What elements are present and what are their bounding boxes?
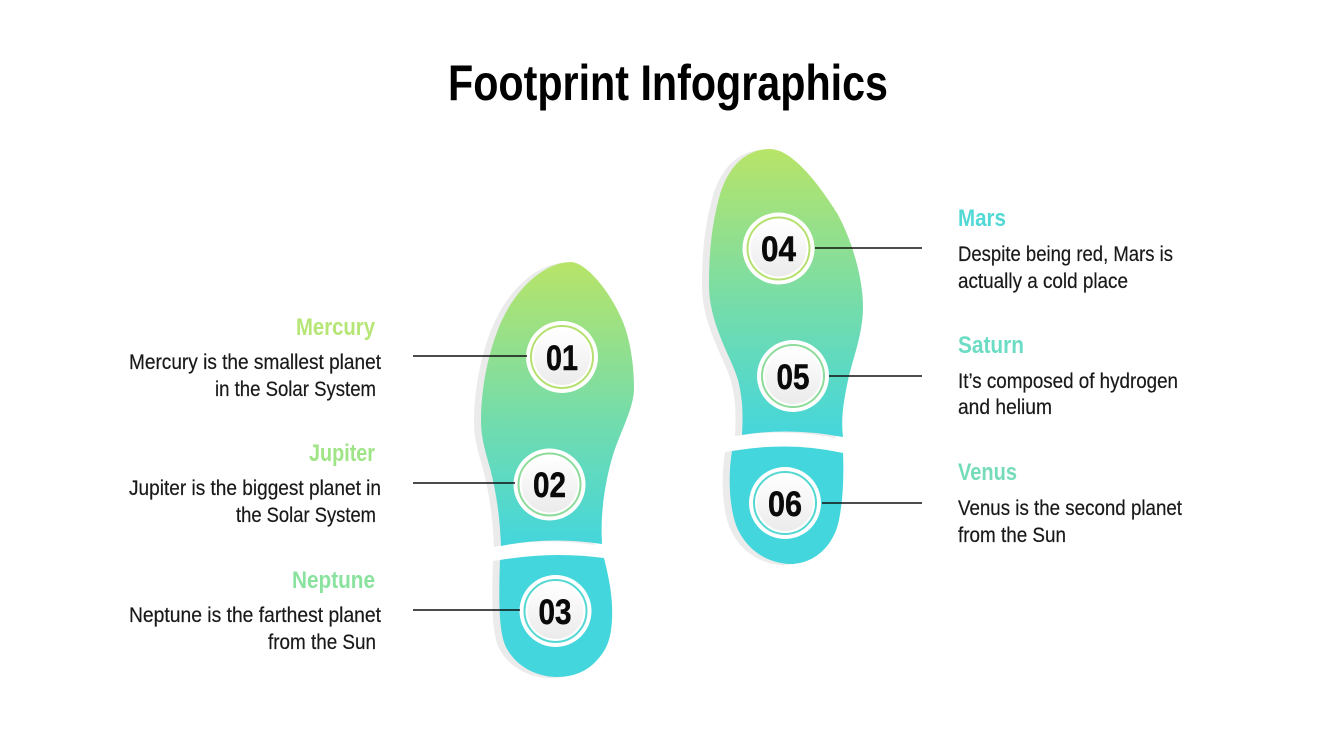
marker 03: 03 <box>538 593 572 632</box>
text block: Jupiter: Jupiter <box>309 440 375 467</box>
text block: Venus: from the Sun <box>958 524 1066 547</box>
text block: Saturn: Saturn <box>958 332 1024 359</box>
marker 05: 05 <box>776 358 810 397</box>
text block: Neptune: from the Sun <box>268 631 376 654</box>
text block: Mercury: Mercury <box>296 314 376 341</box>
marker 02 <box>514 448 586 520</box>
marker 06: 06 <box>768 485 802 524</box>
text block: Jupiter <box>129 440 381 527</box>
text block: Venus: Venus is the second planet <box>958 497 1182 520</box>
left sole <box>481 262 634 546</box>
text block: Mercury: Mercury is the smallest planet <box>129 351 381 374</box>
left heel shadow <box>492 556 605 678</box>
marker 04: 04 <box>761 230 796 269</box>
text block: Saturn: It’s composed of hydrogen <box>958 370 1178 393</box>
marker 06 <box>749 467 821 539</box>
text block: Jupiter: the Solar System <box>236 504 376 527</box>
right sole shadow <box>702 150 856 438</box>
marker 03 <box>520 575 592 647</box>
text block: Jupiter: Jupiter is the biggest planet in <box>129 477 381 500</box>
text block: Saturn: and helium <box>958 396 1052 419</box>
marker 05 <box>757 340 829 412</box>
text block: Mercury <box>129 314 381 401</box>
text block: Mars <box>958 205 1173 293</box>
text block: Mars: actually a cold place <box>958 270 1128 293</box>
text block: Mars: Mars <box>958 205 1006 232</box>
text block: Neptune: Neptune <box>292 567 375 594</box>
left footprint <box>474 262 634 678</box>
right heel <box>730 446 843 564</box>
text block: Neptune <box>129 567 381 654</box>
left sole shadow <box>474 263 627 547</box>
right heel shadow <box>723 447 836 565</box>
text block: Mercury: in the Solar System <box>215 378 376 401</box>
marker 01: 01 <box>546 339 578 378</box>
text block: Neptune: Neptune is the farthest planet <box>129 604 381 627</box>
right sole <box>709 149 863 437</box>
title: Footprint Infographics <box>448 55 888 111</box>
right footprint <box>702 149 863 565</box>
text block: Saturn <box>958 332 1178 419</box>
text block: Venus <box>958 459 1182 547</box>
marker 04 <box>742 212 814 284</box>
marker 01 <box>526 321 598 393</box>
text block: Venus: Venus <box>958 459 1017 486</box>
connector lines <box>413 248 922 610</box>
left heel <box>499 555 612 677</box>
marker 02: 02 <box>533 466 566 505</box>
text block: Mars: Despite being red, Mars is <box>958 243 1173 266</box>
